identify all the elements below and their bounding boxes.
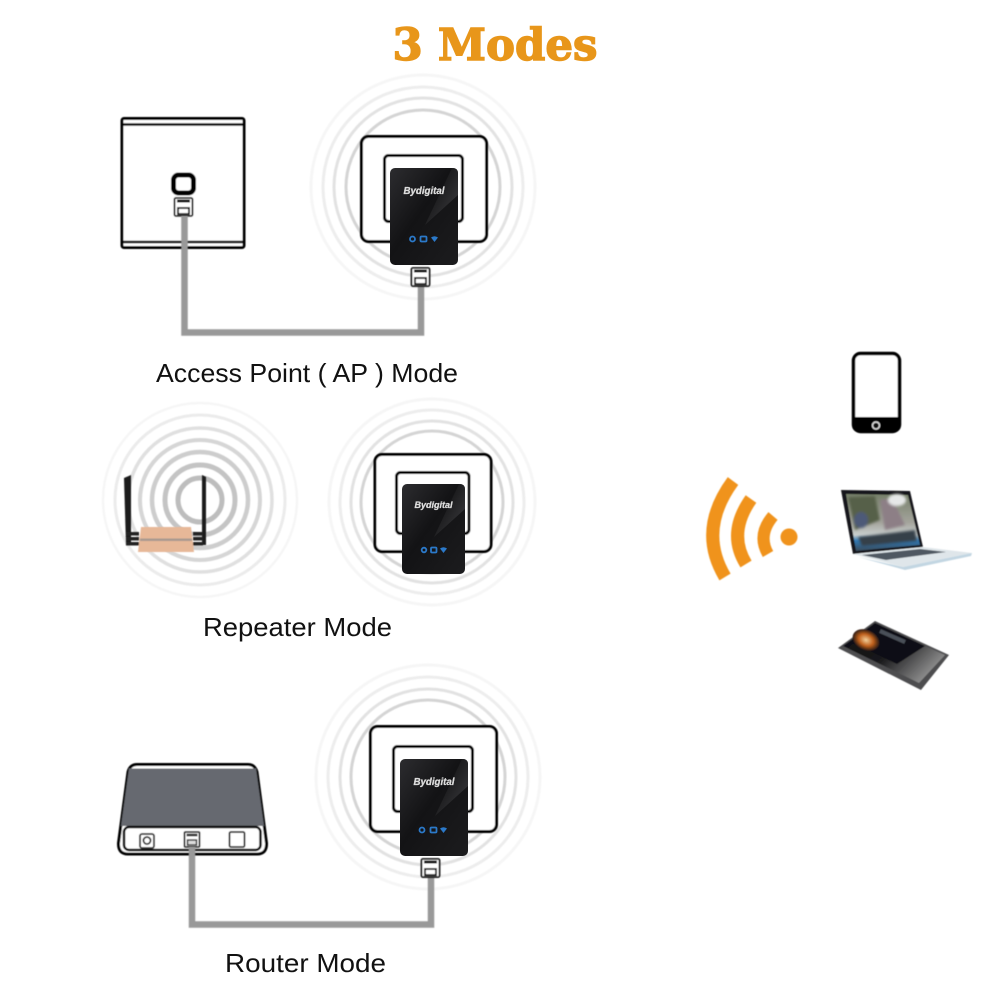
icon: modem — [118, 764, 267, 854]
device: extender — [390, 168, 458, 265]
icon: laptop — [841, 490, 972, 570]
signal rings: router — [103, 403, 297, 597]
icon: router — [124, 475, 206, 552]
label: repeater mode: Repeater Mode — [203, 612, 392, 642]
icon: wall plates — [375, 454, 491, 552]
signal rings: access point — [311, 75, 535, 299]
icon: ethernet port — [412, 268, 430, 286]
signal rings: router mode — [316, 665, 540, 889]
title: 3 Modes — [392, 20, 598, 71]
icon: ethernet port — [422, 859, 440, 877]
cable: access point — [184, 216, 421, 332]
signal rings: extender — [329, 399, 535, 605]
device: extender — [402, 484, 465, 574]
panel: access point mode — [122, 75, 535, 388]
panel: repeater mode — [103, 399, 535, 642]
device: extender: Bydigital — [414, 500, 453, 510]
icon: smartphone — [853, 354, 900, 432]
cable: router mode — [192, 847, 431, 924]
panel: router mode — [118, 665, 540, 978]
label: router mode: Router Mode — [225, 948, 386, 978]
device: extender: Bydigital — [414, 777, 455, 788]
icon: wall panel — [122, 118, 244, 248]
icon: tablet — [838, 621, 949, 690]
label: access point mode: Access Point ( AP ) Mode — [156, 358, 458, 388]
icon: wall plates — [362, 136, 486, 242]
icon: wifi signal — [713, 481, 798, 577]
device: extender: Bydigital — [404, 186, 445, 197]
device: extender — [400, 759, 468, 856]
icon: wall plates — [370, 726, 496, 832]
